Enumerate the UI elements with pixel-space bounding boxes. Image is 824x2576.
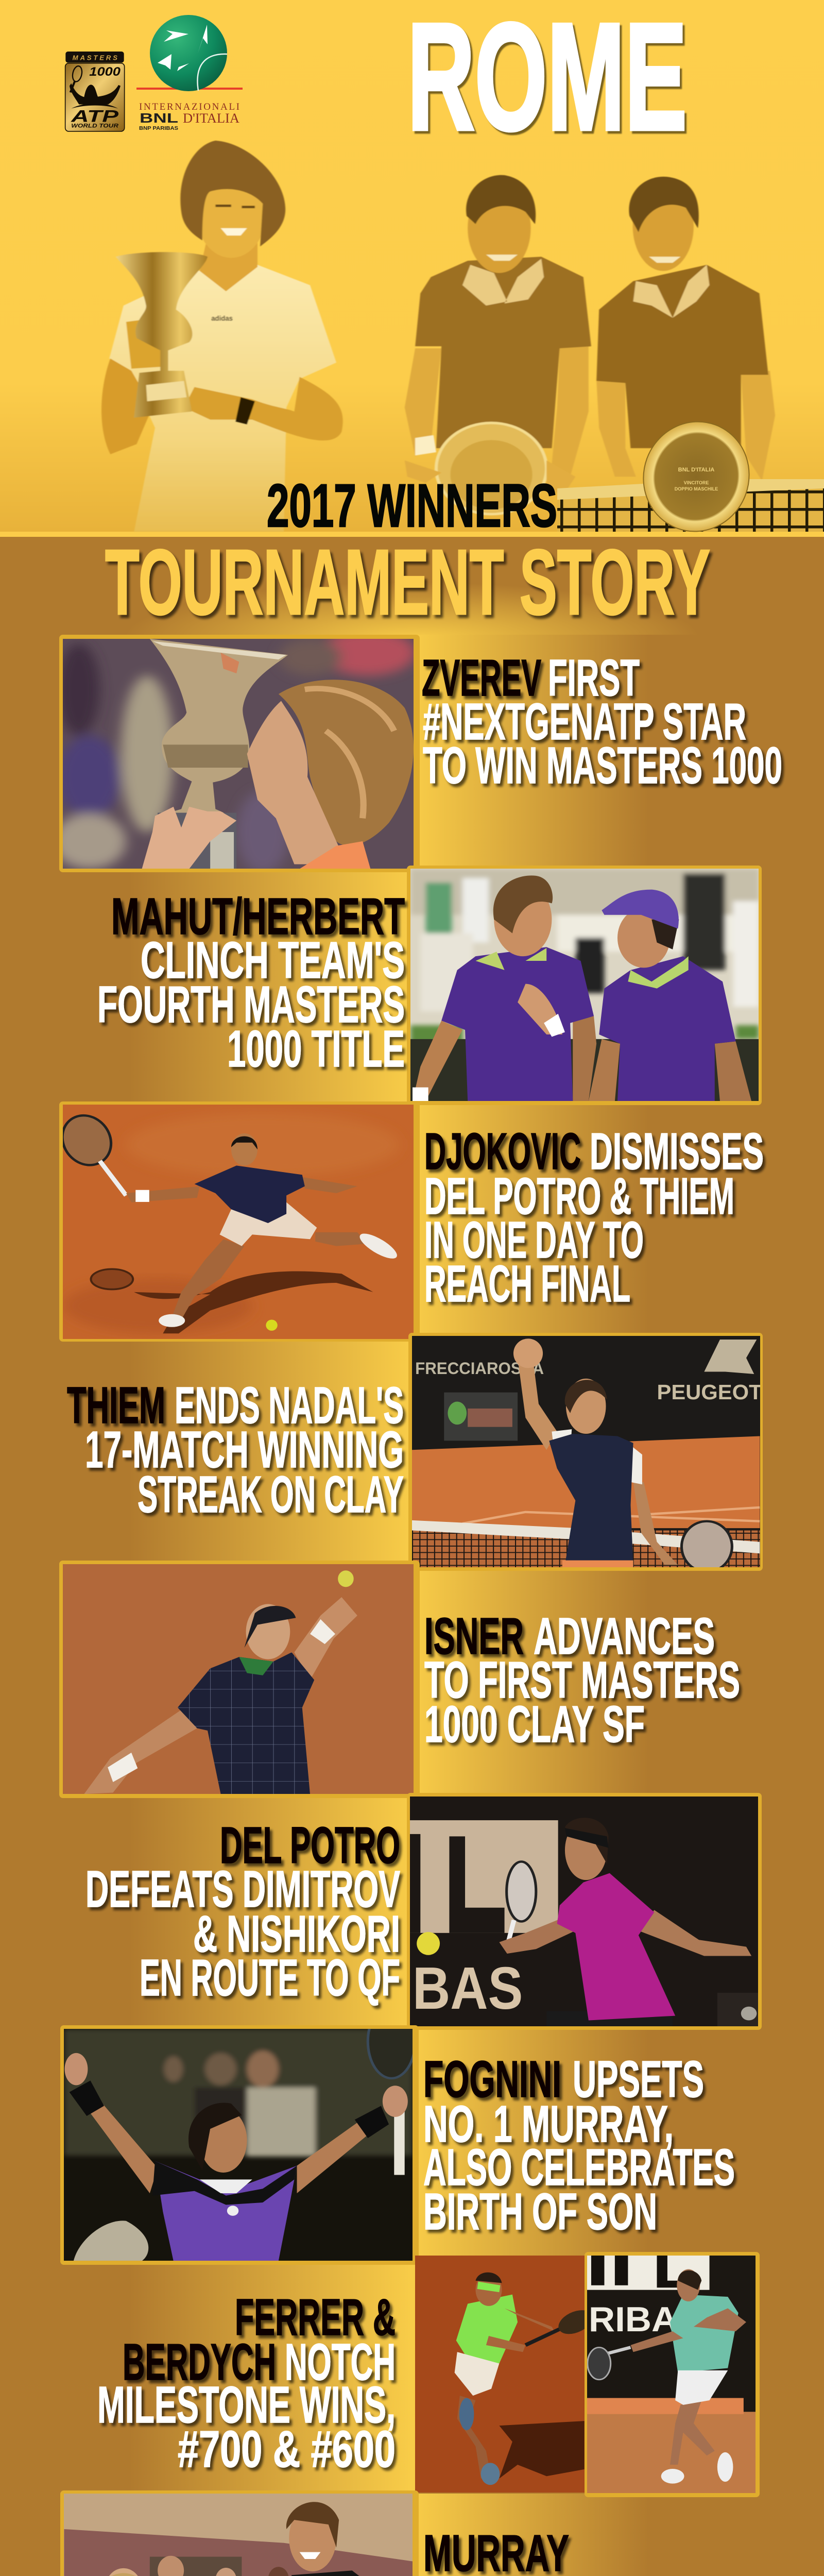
panel: Del Potro bbox=[85, 1793, 762, 2030]
logo: ATP Masters 1000: WORLD TOUR bbox=[71, 123, 118, 129]
story text: Ferrer and Berdych: NOTCH bbox=[285, 2333, 396, 2391]
panel: Djokovic bbox=[55, 1101, 764, 1342]
photo: Fognini celebrating bbox=[64, 2005, 415, 2261]
photo: Murray with birthday cake bbox=[64, 2494, 413, 2576]
story text: Isner: 1000 CLAY SF bbox=[424, 1696, 645, 1753]
story text: Djokovic bbox=[424, 1123, 764, 1313]
plate: Herbert: VINCITORE bbox=[684, 480, 709, 485]
story text: Mahut/Herbert: CLINCH TEAM'S bbox=[141, 931, 405, 989]
story text: Mahut/Herbert: MAHUT/HERBERT bbox=[111, 888, 405, 945]
logo: Internazionali BNL d'Italia: BNP PARIBAS bbox=[139, 126, 178, 131]
logo: ATP Masters 1000: MASTERS bbox=[73, 54, 117, 62]
photo: Thiem waving at net bbox=[412, 1336, 762, 1572]
story text: Thiem: 17-MATCH WINNING bbox=[85, 1421, 404, 1479]
story text: Ferrer and Berdych: #700 & #600 bbox=[178, 2420, 396, 2478]
logo: Internazionali BNL d'Italia: INTERNAZIONALI bbox=[139, 101, 239, 112]
story text: Zverev: ZVEREV bbox=[422, 649, 541, 707]
logo: Internazionali BNL d'Italia bbox=[136, 15, 243, 131]
panel: Zverev bbox=[53, 630, 782, 873]
story text: Thiem: ENDS NADAL'S bbox=[175, 1377, 404, 1434]
photo: Berdych: RIBA bbox=[589, 2300, 678, 2339]
story text: Murray bbox=[423, 2524, 744, 2576]
photo: Isner serving bbox=[63, 1564, 414, 1794]
story text: Fognini: FOGNINI bbox=[423, 2050, 561, 2108]
story text: Mahut/Herbert: 1000 TITLE bbox=[227, 1020, 405, 1078]
net bbox=[557, 474, 824, 532]
photo: Mahut and Herbert with plates bbox=[405, 175, 775, 514]
panel: Fognini bbox=[60, 2005, 735, 2265]
photo: Ferrer bbox=[415, 2256, 597, 2493]
story text: Del Potro: DEFEATS DIMITROV bbox=[85, 1860, 400, 1918]
photo: Zverev with trophy: adidas bbox=[211, 315, 233, 323]
panel: Mahut/Herbert bbox=[97, 866, 762, 1105]
panel: Isner bbox=[59, 1561, 740, 1798]
story text: Isner bbox=[424, 1607, 740, 1753]
story text: Djokovic: DJOKOVIC bbox=[424, 1123, 581, 1180]
photo: Thiem waving at net: FRECCIAROSSA bbox=[415, 1360, 544, 1378]
story text: Thiem: THIEM bbox=[67, 1377, 165, 1434]
plate: Herbert: BNL D'ITALIA bbox=[678, 467, 714, 473]
story text: Zverev bbox=[422, 649, 782, 794]
panel: Ferrer and Berdych bbox=[97, 2252, 760, 2497]
logo: ATP Masters 1000: ATP bbox=[71, 107, 119, 126]
heading: 2017 winners: 2017 WINNERS bbox=[267, 472, 557, 540]
story text: Thiem: STREAK ON CLAY bbox=[138, 1466, 404, 1523]
story text: Fognini: BIRTH OF SON bbox=[423, 2183, 657, 2241]
story text: Isner: ISNER bbox=[424, 1607, 524, 1665]
photo: Del Potro forehand bbox=[410, 1797, 758, 2028]
story text: Zverev: FIRST bbox=[548, 649, 640, 707]
story text: Mahut/Herbert bbox=[97, 888, 405, 1078]
story text: Ferrer and Berdych: BERDYCH bbox=[123, 2333, 276, 2391]
story text: Thiem bbox=[67, 1377, 404, 1523]
story text: Del Potro: & NISHIKORI bbox=[193, 1905, 400, 1963]
story text: Ferrer and Berdych bbox=[97, 2289, 396, 2478]
story text: Fognini: NO. 1 MURRAY, bbox=[423, 2095, 674, 2153]
story text: Ferrer and Berdych: FERRER & bbox=[235, 2289, 396, 2346]
plate: Herbert: DOPPIO MASCHILE bbox=[675, 486, 718, 492]
story text: Djokovic: REACH FINAL bbox=[424, 1255, 630, 1313]
story text: Del Potro: EN ROUTE TO QF bbox=[140, 1949, 400, 2007]
story text: Fognini bbox=[423, 2050, 735, 2241]
story text: Ferrer and Berdych: MILESTONE WINS, bbox=[97, 2376, 396, 2434]
photo: Thiem waving at net: PEUGEOT bbox=[657, 1381, 762, 1404]
photo: Zverev kissing trophy bbox=[53, 630, 415, 873]
panel: Thiem bbox=[67, 1333, 763, 1572]
logo: Internazionali BNL d'Italia: BNL bbox=[140, 110, 178, 126]
logo: ATP Masters 1000: 1000 bbox=[89, 65, 121, 79]
panel: header 2017 winners bbox=[0, 0, 824, 546]
story text: Mahut/Herbert: FOURTH MASTERS bbox=[97, 976, 405, 1033]
panel: tournament story background bbox=[0, 537, 824, 2576]
photo: Berdych bbox=[587, 2256, 756, 2495]
logo: ATP Masters 1000 bbox=[65, 52, 125, 131]
photo: Mahut and Herbert talking bbox=[410, 869, 759, 1101]
logo: Internazionali BNL d'Italia: D'ITALIA bbox=[183, 111, 239, 126]
story text: Del Potro: DEL POTRO bbox=[220, 1817, 400, 1874]
story text: Djokovic: IN ONE DAY TO bbox=[424, 1211, 644, 1269]
story text: Isner: ADVANCES bbox=[534, 1607, 715, 1665]
photo: Djokovic lunging bbox=[55, 1105, 414, 1339]
photo: Zverev with trophy bbox=[101, 141, 343, 532]
story text: Fognini: UPSETS bbox=[573, 2050, 704, 2108]
panel: Murray bbox=[60, 2490, 744, 2576]
story text: Del Potro bbox=[85, 1817, 400, 2007]
plate: Herbert bbox=[628, 407, 764, 546]
photo: Del Potro forehand: BAS bbox=[413, 1955, 523, 2022]
